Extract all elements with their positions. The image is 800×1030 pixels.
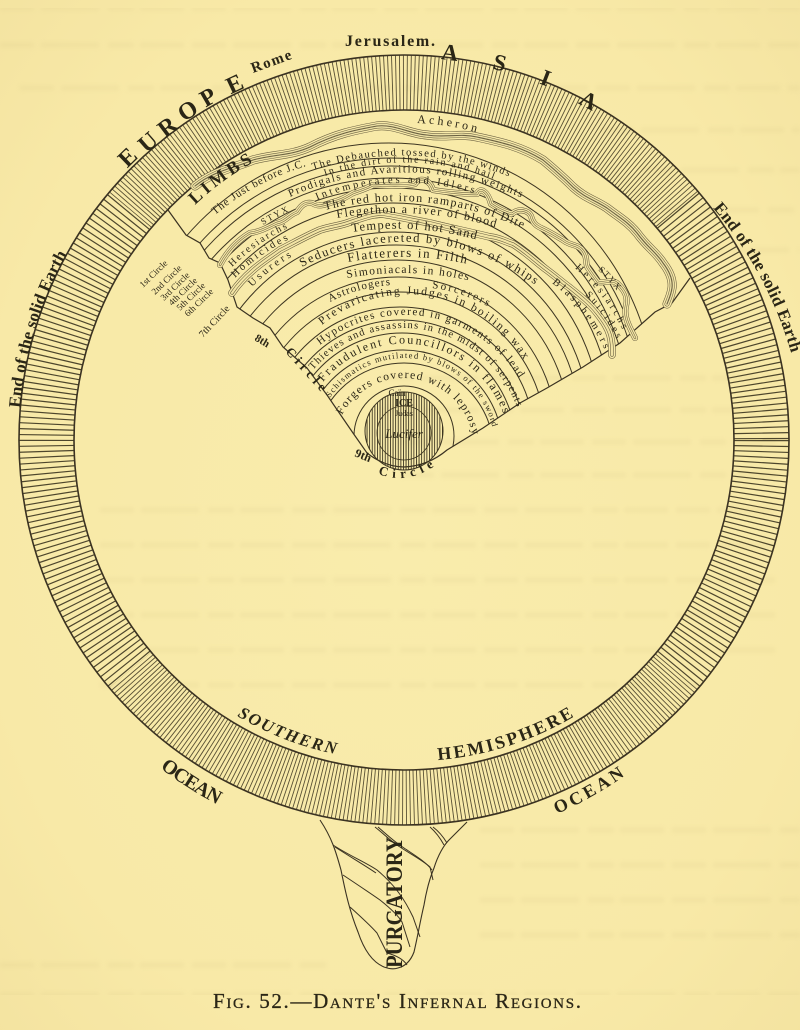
label block: circles one to six [137,258,215,318]
labels of the circles of hell: Simoniacals in holes [346,265,468,280]
labels of the circles of hell: Forgers covered with leprosy [336,372,478,434]
river Acheron [195,126,672,304]
labels of the circles of hell: The Debauched tossed by the winds [311,148,510,176]
icon: Lucifer hatched pit [365,392,443,470]
spiral terrace lines [333,827,447,965]
label: Rome: Rome [249,47,294,77]
heading: ASIA: A [440,39,460,66]
labels of the circles of hell: STYX [598,266,622,290]
label block: circles one to six: 5th Circle [174,280,207,312]
label: seventh circle: 7th Circle [197,303,233,340]
label: eighth circle: 8th [252,332,272,350]
label: Jerusalem: Jerusalem. [345,33,435,50]
labels of the circles of hell: Suicides [586,292,620,338]
heading: ASIA: A [575,85,602,115]
labels of the circles of hell: The red hot iron ramparts of Dite [324,193,524,228]
heading: ASIA [440,39,602,115]
river Phlegethon [232,214,612,355]
circle arcs of hell [186,142,642,446]
labels of the circles of hell: Homicides [230,236,288,278]
label: ninth circle: Circle [380,462,434,478]
heading: EUROPE: U [133,127,163,158]
labels of the circles of hell: Judas [395,409,413,418]
label block: circles one to six: 4th Circle [166,275,199,307]
labels of the circles of hell: Astrologers [330,280,390,302]
labels of the circles of hell: Acheron [417,115,476,132]
labels of the circles of hell: Seducers lacereted by blows of whips [300,234,538,284]
labels of the circles of hell: The Just before J.C. [210,160,306,214]
labels of the circles of hell: Schismatics mutilated by blows of the sword [326,352,498,427]
panel: infernal regions wedge [168,115,690,470]
heading: EUROPE [113,69,248,173]
heading: EUROPE: R [153,111,183,143]
heading: EUROPE: O [173,95,203,127]
heading: EUROPE: P [196,83,221,113]
label block: circles one to six: 6th Circle [182,286,215,318]
label: ninth circle: 9th [353,446,374,465]
label: ninth circle [353,446,434,478]
river Styx [220,180,635,338]
labels of the circles of hell: Flegethon a river of blood [336,205,497,228]
labels of the circles of hell: Tempest of hot Sand [351,220,478,240]
labels of the circles of hell: Intemperates and Idlers [314,176,474,200]
labels of the circles of hell: Heresiarchs [228,224,287,267]
panel: Mount Purgatory [320,820,467,969]
label: eighth circle [252,332,333,397]
label: Ocean, left: OCEAN [163,760,224,804]
label: Southern: SOUTHERN [238,708,338,754]
labels of the circles of hell: In the dirt of the rain and hail [323,156,495,179]
label: End of the solid Earth, left: End of the solid Earth [9,252,66,408]
labels of the circles of hell: Caïn [388,388,406,398]
labels of the circles of hell: LIMBS [187,153,252,205]
caption: Fig. 52.—Dante's Infernal Regions. [213,989,581,1013]
label: Purgatory: PURGATORY [382,837,407,968]
labels of the circles of hell [187,115,626,441]
label block: circles one to six: 3rd Circle [158,270,191,302]
label: eighth circle: Circle [283,344,333,397]
label: Hemisphere: HEMISPHERE [437,707,574,760]
label: Ocean, right: OCEAN [554,766,624,812]
labels of the circles of hell: ICE [395,398,413,409]
heading: EUROPE: E [222,69,248,100]
label block: circles one to six: 1st Circle [137,258,169,289]
labels of the circles of hell: Blasphemers [552,278,608,348]
wedge outline [168,210,690,467]
labels of the circles of hell: Thieves and assassins in the midst of serpents [308,321,522,406]
labels of the circles of hell: Lucifer [384,426,424,441]
heading: EUROPE: E [113,143,143,173]
labels of the circles of hell: Prodigals and Avaritious rolling weights [287,165,522,197]
label block: circles one to six: 2nd Circle [149,263,184,296]
labels of the circles of hell: Hypocrites covered in garments of lead [316,308,526,378]
labels of the circles of hell: Fraudulent Councillors in flames [317,336,508,413]
labels of the circles of hell: Flatterers in Filth [346,248,466,264]
mountain outline [320,820,467,969]
labels of the circles of hell: Prevaricating Judges in boiling wax [318,286,528,360]
labels of the circles of hell: Sorcerers [432,281,490,306]
labels of the circles of hell: Heresiarchs [575,263,626,329]
heading: ASIA: S [491,49,509,76]
labels of the circles of hell: STYX [261,206,288,224]
heading: ASIA: I [537,65,554,91]
panel: earth ring with radial hatching [19,55,789,825]
labels of the circles of hell: Usurers [247,252,291,286]
